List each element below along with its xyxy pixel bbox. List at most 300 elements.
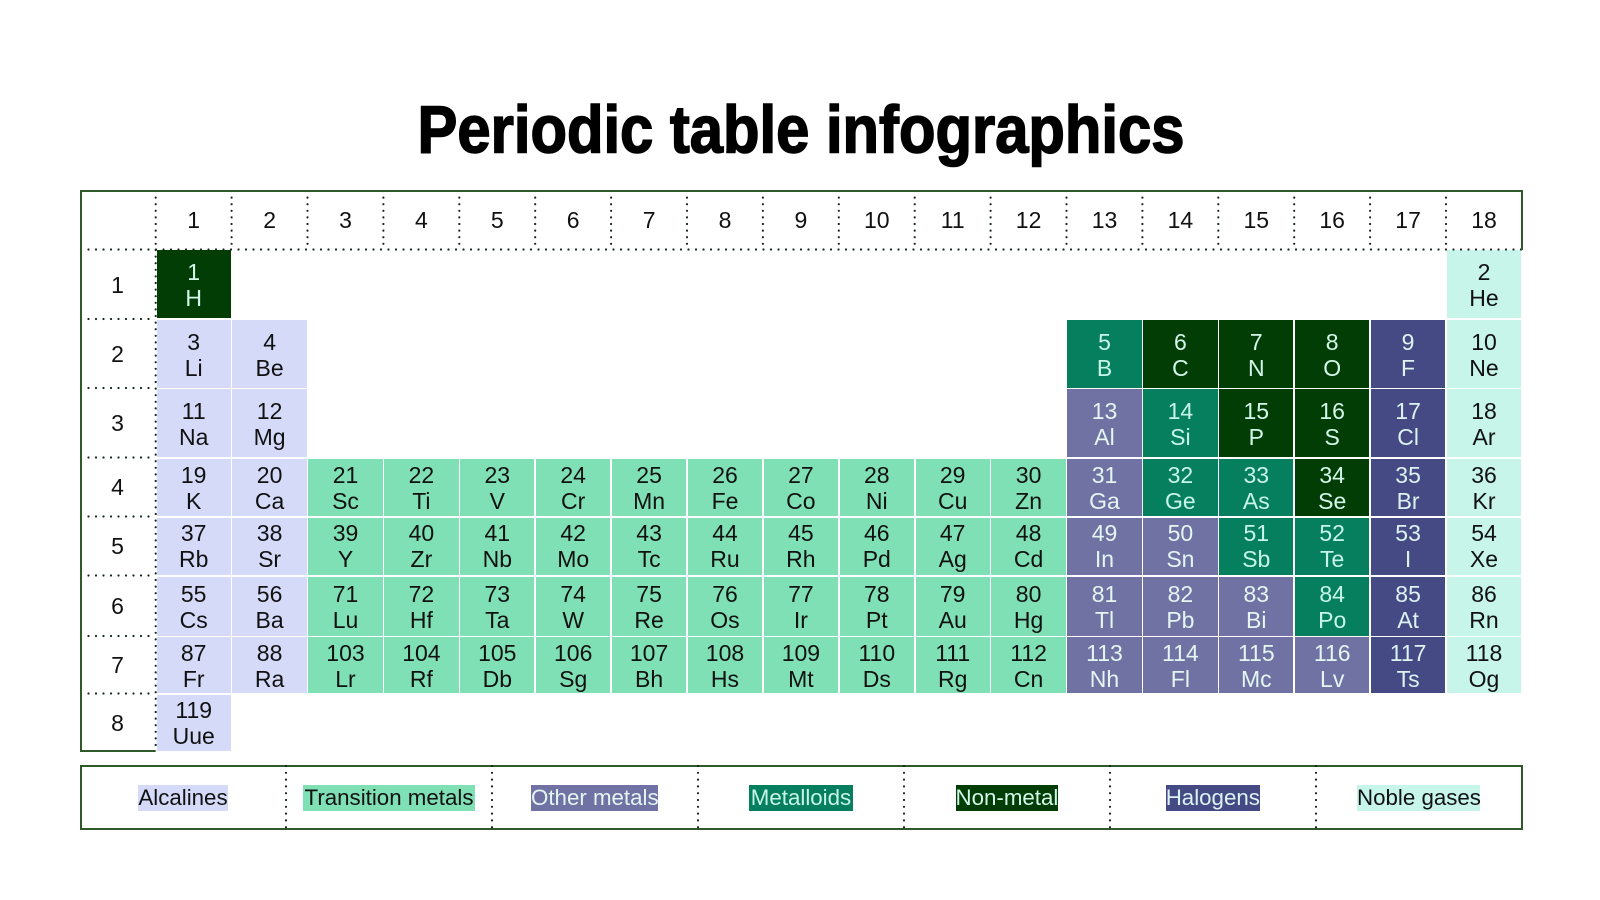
- element: Og: [1447, 637, 1521, 692]
- element: Mo: [536, 518, 610, 575]
- element: Re: 75: [636, 580, 662, 606]
- element: Mc: [1219, 637, 1293, 692]
- element: Ni: Ni: [866, 488, 888, 514]
- element: Uue: 119: [175, 697, 212, 723]
- element: Mg: [232, 389, 307, 456]
- group number header: 15: [1243, 206, 1269, 232]
- element: Be: [232, 320, 307, 388]
- element: Fr: Fr: [183, 666, 205, 692]
- element: Uue: Uue: [173, 723, 215, 749]
- element: Nb: [460, 518, 534, 575]
- element: Bh: [612, 637, 686, 692]
- element: Bi: 83: [1243, 580, 1269, 606]
- element: Al: 13: [1092, 398, 1117, 424]
- element: Ts: 117: [1390, 640, 1426, 666]
- element: C: C: [1172, 355, 1189, 381]
- element: Bh: 107: [630, 640, 668, 666]
- element: Cn: [991, 637, 1066, 692]
- element: Lu: [308, 576, 383, 636]
- group number header: 14: [1168, 206, 1193, 232]
- element: Ts: [1371, 637, 1445, 692]
- panel: periodic table: [80, 190, 1523, 752]
- element: Ar: 18: [1471, 398, 1497, 424]
- element: Ar: Ar: [1472, 424, 1495, 450]
- element: As: [1219, 458, 1293, 516]
- panel: legend: [80, 765, 1523, 830]
- element: Si: 14: [1168, 398, 1193, 424]
- element: Os: 76: [712, 580, 738, 606]
- element: W: W: [562, 606, 584, 632]
- element: In: [1067, 518, 1142, 575]
- element: Zn: 30: [1016, 462, 1041, 488]
- element: Li: 3: [187, 329, 200, 355]
- element: Ds: 110: [858, 640, 895, 666]
- element: Fe: [688, 458, 762, 516]
- element: Se: [1295, 458, 1369, 516]
- period number column: 4: [111, 474, 124, 500]
- element: Cs: [156, 576, 231, 636]
- element: N: 7: [1250, 329, 1263, 355]
- element: Co: Co: [786, 488, 816, 514]
- element: Ga: Ga: [1089, 488, 1120, 514]
- element: Ra: Ra: [255, 666, 284, 692]
- element: Lv: [1295, 637, 1369, 692]
- element: Db: Db: [483, 666, 512, 692]
- element: Pd: Pd: [863, 546, 891, 572]
- element: Ru: 44: [712, 520, 738, 546]
- element: V: [460, 458, 534, 516]
- element: Al: [1067, 389, 1142, 456]
- element: Cu: [916, 458, 990, 516]
- element: Ca: [232, 458, 307, 516]
- element: Mo: Mo: [557, 546, 589, 572]
- element: Se: Se: [1318, 488, 1346, 514]
- element: Hg: [991, 576, 1066, 636]
- element: At: [1371, 576, 1445, 636]
- element: Tc: Tc: [638, 546, 661, 572]
- element: Cl: Cl: [1397, 424, 1419, 450]
- element: I: 53: [1395, 520, 1421, 546]
- element: Kr: 36: [1471, 462, 1497, 488]
- element: W: [536, 576, 610, 636]
- element: In: 49: [1092, 520, 1117, 546]
- element: Ne: 10: [1471, 329, 1497, 355]
- element: Te: Te: [1320, 546, 1344, 572]
- element: Ge: 32: [1168, 462, 1193, 488]
- element: Cd: 48: [1016, 520, 1041, 546]
- element: Cn: Cn: [1014, 666, 1043, 692]
- element: Ne: Ne: [1469, 355, 1499, 381]
- element: Ne: [1447, 320, 1521, 388]
- element: Sb: [1219, 518, 1293, 575]
- element: O: 8: [1326, 329, 1339, 355]
- element: Se: 34: [1319, 462, 1345, 488]
- element: He: 2: [1478, 259, 1490, 285]
- element: Lr: [308, 637, 383, 692]
- element: Nh: [1067, 637, 1142, 692]
- group number header: 17: [1395, 206, 1421, 232]
- element: Be: Be: [256, 355, 284, 381]
- element: Pd: 46: [864, 520, 890, 546]
- element: Og: 118: [1466, 640, 1502, 666]
- element: Au: [916, 576, 990, 636]
- element: N: N: [1248, 355, 1265, 381]
- group number header: 11: [941, 206, 965, 232]
- element: Lu: 71: [333, 580, 358, 606]
- group number header: 10: [864, 206, 890, 232]
- element: Re: Re: [634, 606, 664, 632]
- element: He: [1447, 250, 1521, 318]
- element: Hf: [384, 576, 459, 636]
- element: Kr: Kr: [1472, 488, 1495, 514]
- element: Rn: Rn: [1469, 606, 1499, 632]
- element: Bi: [1219, 576, 1293, 636]
- element: Cs: 55: [181, 580, 206, 606]
- group number header: 16: [1319, 206, 1345, 232]
- element: Nh: 113: [1086, 640, 1123, 666]
- element: Ds: Ds: [863, 666, 891, 692]
- element: Sr: Sr: [258, 546, 281, 572]
- element: Si: [1143, 389, 1218, 456]
- element: Rb: [156, 518, 231, 575]
- element: Cu: 29: [940, 462, 965, 488]
- element: Rf: 104: [402, 640, 441, 666]
- element: Fl: Fl: [1171, 666, 1190, 692]
- element: Sn: Sn: [1166, 546, 1194, 572]
- element: Cr: [536, 458, 610, 516]
- element: Cr: Cr: [561, 488, 585, 514]
- element: Tc: [612, 518, 686, 575]
- legend: Non-metal: Non-metal: [956, 784, 1058, 810]
- element: Sc: Sc: [332, 488, 359, 514]
- group number header: [187, 206, 1497, 232]
- element: Rh: 45: [788, 520, 814, 546]
- period number column: 1: [111, 272, 124, 298]
- element: Cd: [991, 518, 1066, 575]
- group number header: 12: [1016, 206, 1041, 232]
- element: Br: 35: [1395, 462, 1421, 488]
- element: Hg: 80: [1016, 580, 1041, 606]
- element: Sb: 51: [1243, 520, 1269, 546]
- element: Al: Al: [1094, 424, 1115, 450]
- element: Ga: 31: [1092, 462, 1117, 488]
- element: Be: 4: [263, 329, 276, 355]
- element: Sg: Sg: [559, 666, 587, 692]
- element: C: [1143, 320, 1218, 388]
- element: K: 19: [181, 462, 206, 488]
- element: Hs: Hs: [711, 666, 739, 692]
- element: Li: [156, 320, 231, 388]
- element: Si: Si: [1170, 424, 1191, 450]
- element: K: K: [186, 488, 201, 514]
- element: Nb: Nb: [483, 546, 512, 572]
- element: Ir: Ir: [794, 606, 808, 632]
- element: Ca: 20: [257, 462, 282, 488]
- element: Fl: [1143, 637, 1218, 692]
- element: Pt: [840, 576, 914, 636]
- element: Mg: 12: [257, 398, 282, 424]
- element: I: [1371, 518, 1445, 575]
- element: Ir: 77: [788, 580, 814, 606]
- element: Ni: [840, 458, 914, 516]
- element: P: 15: [1243, 398, 1269, 424]
- element: Zr: 40: [409, 520, 434, 546]
- period number column: 2: [111, 341, 124, 367]
- element: Li: Li: [185, 355, 203, 381]
- element: Pt: Pt: [866, 606, 888, 632]
- period number column: 6: [111, 593, 124, 619]
- element: Db: 105: [478, 640, 516, 666]
- element: Mt: Mt: [788, 666, 814, 692]
- element: Xe: Xe: [1470, 546, 1498, 572]
- element: S: 16: [1319, 398, 1345, 424]
- element: Ga: [1067, 458, 1142, 516]
- group number header: 2: [263, 206, 276, 232]
- element: O: [1295, 320, 1369, 388]
- element: Pd: [840, 518, 914, 575]
- element: Ba: [232, 576, 307, 636]
- element: Mg: Mg: [254, 424, 286, 450]
- element: Po: [1295, 576, 1369, 636]
- element: F: 9: [1402, 329, 1414, 355]
- element: W: 74: [560, 580, 586, 606]
- element: Rg: 111: [935, 640, 970, 666]
- element: At: At: [1397, 606, 1419, 632]
- element: Au: 79: [940, 580, 965, 606]
- element: Po: 84: [1319, 580, 1345, 606]
- element: Ru: Ru: [710, 546, 740, 572]
- element: Zn: Zn: [1015, 488, 1042, 514]
- element: Sg: 106: [554, 640, 592, 666]
- element: P: [1219, 389, 1293, 456]
- element: S: [1295, 389, 1369, 456]
- legend: Alcalines: Alcalines: [138, 784, 228, 810]
- legend: Noble gases: Noble gases: [1357, 784, 1481, 810]
- element: Ag: [916, 518, 990, 575]
- element: Cs: Cs: [180, 606, 208, 632]
- element: Fr: 87: [181, 640, 206, 666]
- element: Cn: 112: [1010, 640, 1047, 666]
- element: Os: [688, 576, 762, 636]
- element: Fe: 26: [712, 462, 738, 488]
- element: Cu: Cu: [938, 488, 967, 514]
- legend: Halogens: Halogens: [1166, 784, 1260, 810]
- element: Cr: 24: [560, 462, 586, 488]
- element: He: He: [1469, 285, 1499, 311]
- element: O: O: [1323, 355, 1341, 381]
- element: Mc: Mc: [1241, 666, 1272, 692]
- element: Cd: Cd: [1014, 546, 1043, 572]
- element: V: V: [490, 488, 505, 514]
- element: Tl: 81: [1092, 580, 1117, 606]
- element: F: [1371, 320, 1445, 388]
- element: Uue: [156, 694, 231, 751]
- element: Og: Og: [1469, 666, 1499, 692]
- element: Ca: Ca: [255, 488, 284, 514]
- element: Lv: 116: [1314, 640, 1351, 666]
- element: H: 1: [187, 259, 200, 285]
- group number header: 1: [187, 206, 200, 232]
- element: Ts: Ts: [1397, 666, 1420, 692]
- element: Ru: [688, 518, 762, 575]
- element: Ir: [764, 576, 838, 636]
- legend: Transition metals: Transition metals: [305, 784, 473, 810]
- element: Ra: [232, 637, 307, 692]
- element: K: [156, 458, 231, 516]
- period number column: 7: [111, 652, 124, 678]
- element: H: H: [185, 285, 202, 311]
- element: Rf: Rf: [410, 666, 433, 692]
- element: Ag: Ag: [939, 546, 967, 572]
- element: Pb: Pb: [1166, 606, 1194, 632]
- element: Rh: Rh: [786, 546, 816, 572]
- element: Mn: [612, 458, 686, 516]
- element: P: P: [1249, 424, 1264, 450]
- element: Po: Po: [1318, 606, 1346, 632]
- element: Ba: Ba: [256, 606, 284, 632]
- element: Rg: [916, 637, 990, 692]
- element: Hs: [688, 637, 762, 692]
- element: Kr: [1447, 458, 1521, 516]
- element: Sr: 38: [257, 520, 282, 546]
- element: Mo: 42: [560, 520, 586, 546]
- element: Pb: 82: [1168, 580, 1193, 606]
- element: Hf: Hf: [410, 606, 433, 632]
- element: Fl: 114: [1162, 640, 1199, 666]
- element: Sn: [1143, 518, 1218, 575]
- element: Y: 39: [333, 520, 358, 546]
- element: Fr: [156, 637, 231, 692]
- element: Mn: Mn: [633, 488, 665, 514]
- group number header: 8: [719, 206, 731, 232]
- element: Pb: [1143, 576, 1218, 636]
- element: Tc: 43: [636, 520, 662, 546]
- element: Ag: 47: [940, 520, 965, 546]
- element: Ti: 22: [409, 462, 434, 488]
- element: Sg: [536, 637, 610, 692]
- element: Ge: Ge: [1165, 488, 1196, 514]
- element: Ta: [460, 576, 534, 636]
- group number header: 18: [1471, 206, 1497, 232]
- element: Mt: 109: [782, 640, 820, 666]
- period number column: [111, 272, 124, 736]
- element: Rb: Rb: [179, 546, 208, 572]
- element: Sr: [232, 518, 307, 575]
- element: Mt: [764, 637, 838, 692]
- element: Hg: Hg: [1014, 606, 1043, 632]
- element: Lv: Lv: [1320, 666, 1344, 692]
- element: H: [156, 250, 231, 318]
- element: Zr: [384, 518, 459, 575]
- element: B: 5: [1098, 329, 1111, 355]
- element: In: In: [1095, 546, 1114, 572]
- element: Ar: [1447, 389, 1521, 456]
- element: As: As: [1243, 488, 1270, 514]
- element: Na: [156, 389, 231, 456]
- element: Sn: 50: [1168, 520, 1193, 546]
- element: Pt: 78: [864, 580, 890, 606]
- element: Rn: [1447, 576, 1521, 636]
- element: Ni: 28: [864, 462, 890, 488]
- element: Bh: Bh: [635, 666, 663, 692]
- element: Ds: [840, 637, 914, 692]
- element: Nh: Nh: [1090, 666, 1119, 692]
- element: Co: 27: [788, 462, 814, 488]
- element: Rf: [384, 637, 459, 692]
- element: Lr: 103: [326, 640, 365, 666]
- group number header: 9: [794, 206, 807, 232]
- element: Y: Y: [338, 546, 353, 572]
- element: Rg: Rg: [938, 666, 967, 692]
- element: F: F: [1401, 355, 1415, 381]
- period number column: 5: [111, 533, 124, 559]
- legend: Other metals: Other metals: [531, 784, 659, 810]
- element: Ta: Ta: [485, 606, 509, 632]
- element: Sc: [308, 458, 383, 516]
- element: As: 33: [1243, 462, 1269, 488]
- element: S: S: [1325, 424, 1340, 450]
- element: Br: [1371, 458, 1445, 516]
- element: Mn: 25: [636, 462, 662, 488]
- element: Ti: [384, 458, 459, 516]
- element: Ge: [1143, 458, 1218, 516]
- element: Bi: Bi: [1246, 606, 1266, 632]
- title: Periodic table infographics: [418, 93, 1184, 168]
- element: C: 6: [1174, 329, 1187, 355]
- element: Nb: 41: [484, 520, 510, 546]
- element: Ba: 56: [257, 580, 282, 606]
- element: Db: [460, 637, 534, 692]
- group number header: 5: [491, 206, 504, 232]
- group number header: 6: [567, 206, 580, 232]
- element: Te: [1295, 518, 1369, 575]
- element: Sb: Sb: [1242, 546, 1270, 572]
- element: Fe: Fe: [712, 488, 738, 514]
- element: Br: Br: [1397, 488, 1420, 514]
- group number header: 7: [643, 206, 655, 232]
- element: V: 23: [484, 462, 510, 488]
- element: Lr: Lr: [335, 666, 356, 692]
- element: Hf: 72: [409, 580, 434, 606]
- element: I: I: [1405, 546, 1411, 572]
- element: Au: Au: [939, 606, 967, 632]
- legend: Metalloids: Metalloids: [751, 784, 851, 810]
- element: Ra: 88: [257, 640, 282, 666]
- element: At: 85: [1395, 580, 1421, 606]
- element: Os: Os: [710, 606, 740, 632]
- element: Na: Na: [179, 424, 208, 450]
- element: Lu: Lu: [333, 606, 358, 632]
- element: Rh: [764, 518, 838, 575]
- element: Re: [612, 576, 686, 636]
- period number column: 3: [111, 410, 124, 436]
- element: Xe: 54: [1471, 520, 1497, 546]
- element: Rn: 86: [1471, 580, 1497, 606]
- element: N: [1219, 320, 1293, 388]
- element: Na: 11: [182, 398, 206, 424]
- element: Rb: 37: [181, 520, 206, 546]
- element: B: [1067, 320, 1142, 388]
- element: Zr: Zr: [411, 546, 432, 572]
- element: Hs: 108: [706, 640, 744, 666]
- element: B: B: [1097, 355, 1112, 381]
- element: Co: [764, 458, 838, 516]
- element: Sc: 21: [333, 462, 358, 488]
- element: Ti: Ti: [412, 488, 431, 514]
- element: Cl: 17: [1395, 398, 1421, 424]
- element: Cl: [1371, 389, 1445, 456]
- element: Zn: [991, 458, 1066, 516]
